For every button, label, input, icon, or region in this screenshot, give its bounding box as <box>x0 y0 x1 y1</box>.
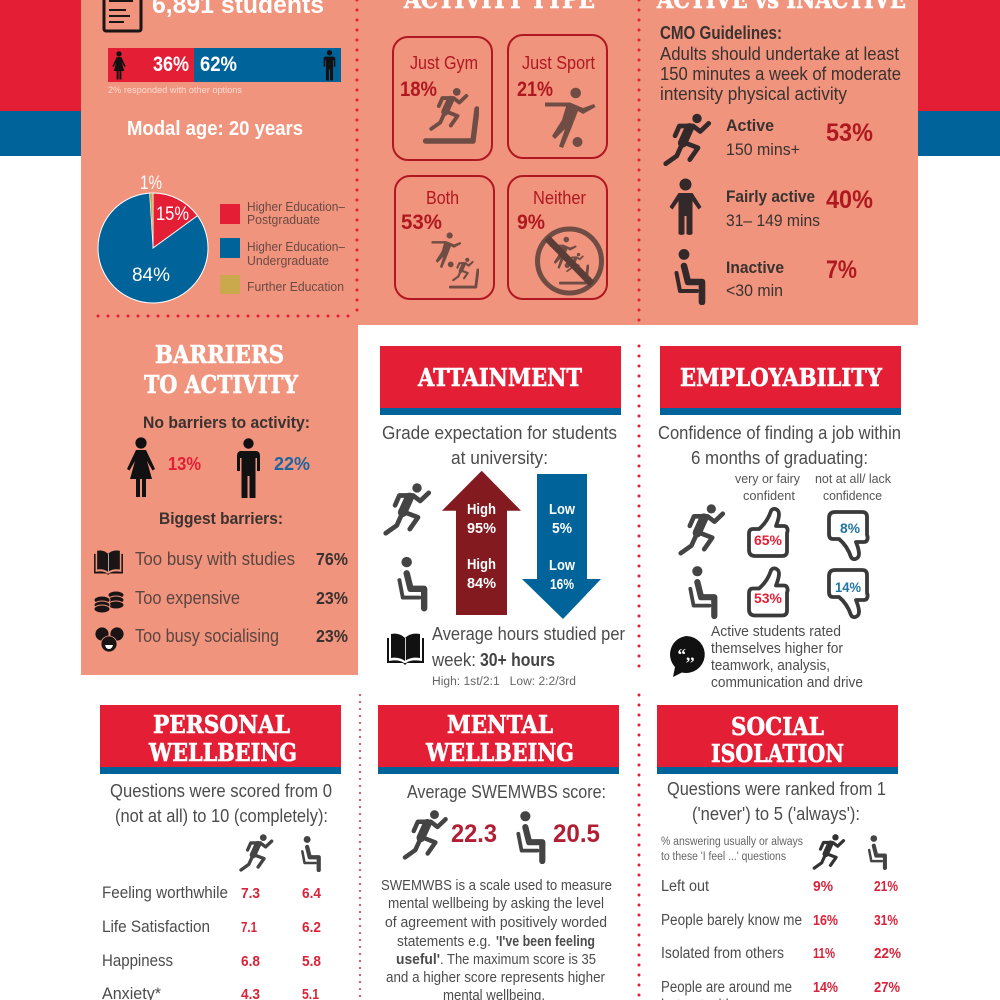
text: average score: Average SWEMWBS score: <box>407 782 606 802</box>
row: too busy with studies <box>94 549 348 575</box>
score: inactive <box>518 811 600 861</box>
card: neither: 9% <box>517 211 545 234</box>
icon: questionnaire document <box>104 0 141 31</box>
row: active: Active <box>726 116 774 135</box>
thumb up: active: 65% <box>754 533 782 548</box>
row: fairly active: 31– 149 mins <box>726 211 820 230</box>
heading banner: social isolation: ISOLATION <box>711 739 844 768</box>
heading banner: attainment: ATTAINMENT <box>417 363 582 392</box>
legend: education level: Further Education <box>247 279 344 294</box>
card: both <box>395 176 494 299</box>
arrow: low grade <box>522 474 601 619</box>
row: too busy with studies: 76% <box>316 549 348 569</box>
row: left out: Left out <box>661 878 710 895</box>
text: SWEMWBS explanation: SWEMWBS is a scale used to measure <box>381 878 612 894</box>
heading banner: personal wellbeing: WELLBEING <box>148 738 297 767</box>
row: too expensive: 23% <box>316 588 348 608</box>
arrow: high grade: 95% <box>467 520 496 537</box>
text: job confidence <box>658 423 901 468</box>
row: active: 150 mins+ <box>726 140 800 159</box>
text: table note: to these 'I feel ...' questions <box>661 851 786 863</box>
no barriers: men: 22% <box>274 453 310 474</box>
row: too busy socialising: Too busy socialising <box>135 626 279 646</box>
card: just gym: Just Gym <box>410 53 478 73</box>
row: inactive: 7% <box>826 256 857 284</box>
text: ranking note: ('never') to 5 ('always'): <box>692 804 860 824</box>
row: fairly active: 40% <box>826 186 873 214</box>
card: just sport: Just Sport <box>522 53 595 73</box>
card: both: 53% <box>401 211 442 234</box>
row: too expensive <box>94 588 348 613</box>
column icon: inactive <box>869 835 885 868</box>
row: left out: 21% <box>874 878 898 895</box>
row: feeling worthwhile: 6.4 <box>302 885 322 902</box>
card: neither <box>508 176 607 299</box>
row: happiness: 5.8 <box>302 953 321 970</box>
row: life satisfaction <box>102 917 321 936</box>
icon: active runner <box>681 504 723 553</box>
card: just gym <box>393 37 492 160</box>
icon: inactive sitter <box>399 557 424 608</box>
thumb up: active <box>749 509 788 556</box>
icon: speech bubble <box>670 636 705 677</box>
row: people are around me <box>661 979 900 1000</box>
text: hours studied: Average hours studied per <box>432 624 625 644</box>
heading banner: mental wellbeing: MENTAL <box>447 710 553 739</box>
column icon: inactive <box>302 836 319 870</box>
legend: education level: Postgraduate <box>247 212 320 227</box>
row: feeling worthwhile <box>102 883 322 902</box>
heading banner: personal wellbeing: PERSONAL <box>153 710 290 739</box>
thumb up: inactive <box>749 568 788 616</box>
panel: social isolation <box>657 705 901 1000</box>
column labels: confidence <box>823 488 882 503</box>
thumb down: active <box>829 512 868 559</box>
arrow: high grade <box>442 471 521 615</box>
arrow: high grade: 84% <box>467 575 496 592</box>
row: happiness: Happiness <box>102 951 173 970</box>
row: anxiety <box>102 984 319 1000</box>
no barriers: women: 13% <box>168 453 201 474</box>
biggest barriers subheading: Biggest barriers: <box>159 510 283 528</box>
row: people are around me: 14% <box>813 979 838 996</box>
text: active students rated <box>711 624 863 691</box>
icon: active runner <box>386 483 429 533</box>
row: left out <box>661 878 898 895</box>
row: isolated from others: 11% <box>813 945 835 962</box>
column labels <box>735 471 891 503</box>
icon: speech bubble: “,, <box>678 645 694 664</box>
card: just sport <box>508 35 607 158</box>
row: people barely know me: 31% <box>874 912 898 929</box>
row: inactive: <30 min <box>726 281 783 300</box>
heading banner: social isolation <box>657 705 898 774</box>
header band: left <box>0 0 81 156</box>
row: feeling worthwhile: Feeling worthwhile <box>102 883 228 902</box>
text: active students rated: themselves higher for <box>711 641 843 657</box>
no barriers: men <box>237 438 310 498</box>
gender footnote: 2% responded with other options <box>108 85 242 96</box>
text: SWEMWBS explanation: of agreement with positively worded <box>385 915 607 931</box>
text: SWEMWBS explanation: 'I've been feeling <box>496 934 595 950</box>
heading banner: mental wellbeing <box>378 705 619 774</box>
row: fairly active: Fairly active <box>726 187 815 206</box>
arrow: high grade: High <box>467 501 496 518</box>
row: too busy socialising: 23% <box>316 626 348 646</box>
card: just gym: 18% <box>400 78 437 101</box>
panel: active vs inactive <box>656 0 906 302</box>
row: isolated from others <box>661 945 901 962</box>
thumb down: inactive: 14% <box>835 580 861 595</box>
gender bar: 36% <box>153 53 189 76</box>
arrow: high grade: High <box>467 556 496 573</box>
text: hours studied: 30+ hours <box>480 650 555 670</box>
panel: personal wellbeing <box>100 705 341 1000</box>
icon: faces <box>95 627 124 652</box>
text: table note: % answering usually or always <box>661 836 803 848</box>
column icon: active <box>241 834 272 870</box>
heading banner: employability <box>660 346 901 415</box>
score: active: 22.3 <box>451 820 497 848</box>
column labels: very or fairy <box>735 471 800 486</box>
heading: barriers to activity: BARRIERS <box>155 340 284 369</box>
row: isolated from others: Isolated from others <box>661 945 784 962</box>
row: too busy socialising <box>95 626 348 652</box>
panel: activity type <box>393 0 607 299</box>
text: active students rated: Active students rated <box>711 624 841 640</box>
row: people barely know me: 16% <box>813 912 838 929</box>
text: active students rated: teamwork, analysis, <box>711 658 830 674</box>
CMO guidelines text: intensity physical activity <box>660 84 847 104</box>
row: too busy with studies: Too busy with studies <box>135 549 295 569</box>
legend: education level: Higher Education– <box>247 199 346 214</box>
legend: education level <box>220 199 346 294</box>
gender bar: 62% <box>200 53 237 76</box>
card: just sport: 21% <box>517 78 553 101</box>
heading banner: personal wellbeing <box>100 705 341 774</box>
no barriers subheading: No barriers to activity: <box>143 414 310 432</box>
column labels: not at all/ lack <box>815 471 891 486</box>
arrow: low grade: Low <box>549 501 575 518</box>
icon: coins <box>94 591 124 613</box>
card: both: Both <box>426 188 459 208</box>
no barriers: women <box>127 437 201 497</box>
pie chart: education level: 84% <box>132 265 170 286</box>
text: grade expectation: Grade expectation for students <box>382 423 617 443</box>
heading banner: employability: EMPLOYABILITY <box>680 363 883 392</box>
text: SWEMWBS explanation <box>381 878 612 1000</box>
column icon: active <box>814 834 843 868</box>
text: SWEMWBS explanation: . The maximum score is 35 <box>440 952 596 968</box>
thumb down: inactive <box>829 570 868 617</box>
panel: employability <box>658 346 901 691</box>
row: active <box>666 114 873 164</box>
gender bar <box>108 48 341 82</box>
text: hours studied <box>431 624 625 688</box>
score: inactive: 20.5 <box>553 820 600 848</box>
header band: right <box>918 0 1000 156</box>
row: people barely know me: People barely know me <box>661 912 802 929</box>
text: SWEMWBS explanation: statements e.g. <box>397 934 491 950</box>
thumb down: active: 8% <box>840 521 860 536</box>
row: left out: 9% <box>813 878 833 895</box>
arrow: low grade: Low <box>549 557 575 574</box>
row: life satisfaction: Life Satisfaction <box>102 917 210 936</box>
row: happiness <box>102 951 321 970</box>
pie chart: education level <box>98 173 208 303</box>
row: people barely know me <box>661 912 898 929</box>
text: SWEMWBS explanation: mental wellbeing by asking the level <box>388 896 604 912</box>
score: active <box>405 810 497 857</box>
legend: education level: Higher Education– <box>247 239 346 254</box>
text: SWEMWBS explanation: and a higher score represents higher <box>386 970 605 986</box>
pie chart: education level: 1% <box>140 173 162 194</box>
CMO guidelines text: 150 minutes a week of moderate <box>660 64 901 84</box>
icon: inactive sitter <box>690 566 714 616</box>
text: SWEMWBS explanation: useful' <box>396 952 440 968</box>
legend: education level: Undergraduate <box>247 253 329 268</box>
heading banner: mental wellbeing: WELLBEING <box>425 738 574 767</box>
text: scoring note: (not at all) to 10 (completely): <box>115 806 328 826</box>
text: job confidence: 6 months of graduating: <box>691 448 868 468</box>
salmon background panel: barriers <box>81 320 358 675</box>
row: people are around me: People are around me <box>661 979 792 996</box>
panel: attainment <box>380 346 625 688</box>
heading banner: social isolation: SOCIAL <box>731 712 824 741</box>
arrow: low grade: 5% <box>552 520 572 537</box>
panel: barriers to activity <box>94 340 348 652</box>
text: scoring note: Questions were scored from 0 <box>110 781 332 801</box>
card: neither: Neither <box>533 188 586 208</box>
text: ranking note <box>667 779 886 824</box>
heading banner: attainment <box>380 346 621 415</box>
text: job confidence: Confidence of finding a job within <box>658 423 901 443</box>
text: grade expectation: at university: <box>451 448 548 468</box>
CMO guidelines text: Adults should undertake at least <box>660 44 899 64</box>
row: life satisfaction: 7.1 <box>241 919 257 936</box>
CMO guidelines text: CMO Guidelines: <box>660 23 782 43</box>
row: fairly active <box>670 178 873 235</box>
thumb up: inactive: 53% <box>754 591 782 606</box>
text: hours studied: week: <box>431 650 476 670</box>
pie chart: education level: 15% <box>156 204 189 225</box>
row: people are around me: 27% <box>874 979 900 996</box>
text: hours studied: High: 1st/2:1 Low: 2:2/3rd <box>432 676 576 688</box>
row: feeling worthwhile: 7.3 <box>241 885 260 902</box>
text: grade expectation <box>382 423 617 468</box>
text: ranking note: Questions were ranked from 1 <box>667 779 886 799</box>
CMO guidelines text <box>660 23 901 104</box>
text: active students rated: communication and drive <box>711 675 863 691</box>
row: life satisfaction: 6.2 <box>302 919 321 936</box>
panel: mental wellbeing <box>378 705 619 1000</box>
arrow: low grade: 16% <box>550 576 574 593</box>
text: scoring note <box>110 781 332 826</box>
row: active: 53% <box>826 119 873 147</box>
modal age: Modal age: 20 years <box>127 118 303 140</box>
panel: respondents <box>98 0 346 303</box>
salmon background panel: top row <box>81 0 918 325</box>
row: isolated from others: 22% <box>874 945 901 962</box>
heading: barriers to activity <box>144 340 299 399</box>
row: inactive: Inactive <box>726 258 784 277</box>
row: inactive <box>676 249 857 302</box>
row: too expensive: Too expensive <box>135 588 240 608</box>
column labels: confident <box>743 488 795 503</box>
icon: open book <box>387 634 424 665</box>
text: table note <box>661 836 803 863</box>
row: happiness: 6.8 <box>241 953 260 970</box>
heading: barriers to activity: TO ACTIVITY <box>144 370 299 399</box>
